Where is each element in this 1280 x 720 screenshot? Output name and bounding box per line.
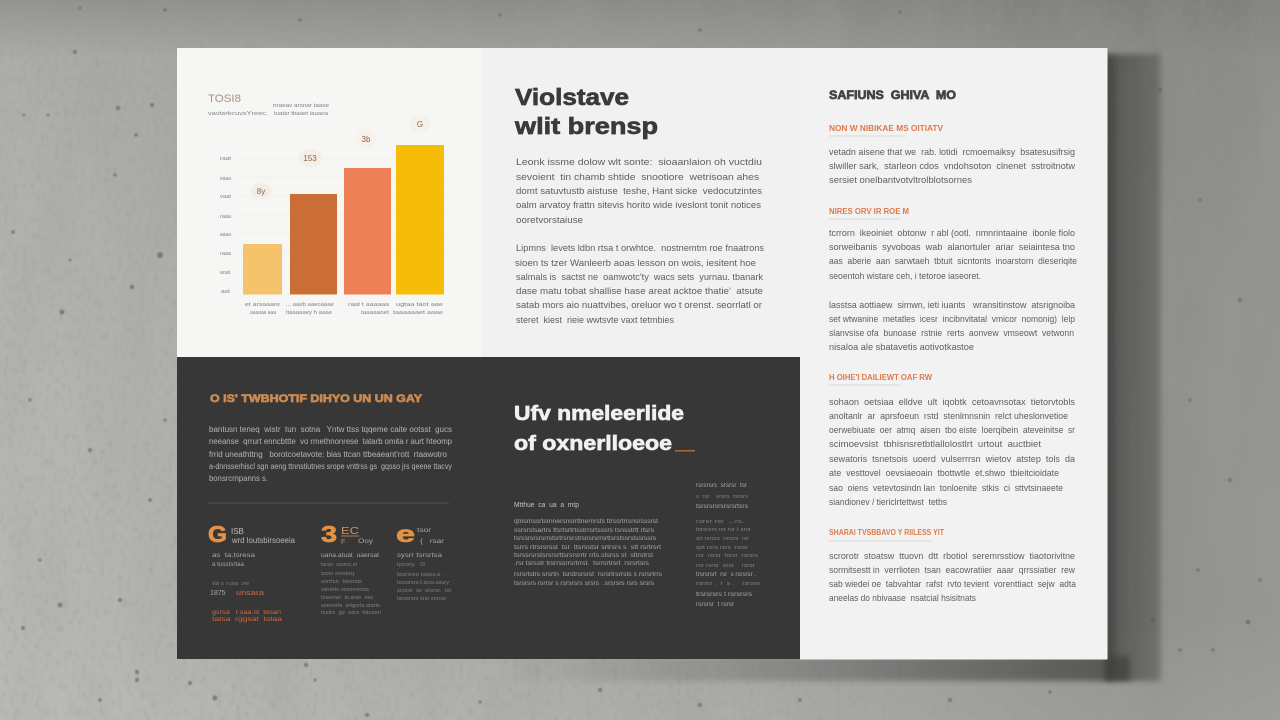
section 3: siandionev / tiericlrtettwst tetbs (829, 497, 947, 508)
text block: timeline body: tsrssrsrstsrsrsrttsrsrsrrtr rrts.stsrss st sttrstrst (514, 553, 653, 559)
section 1: vetadn aisene that we rab. lotidi rcmoemaiksy bsatesusifrsig (829, 147, 1075, 158)
stat column 2: tsstrs gs ssrs tstsssn (321, 610, 381, 616)
stat column 3: tssrsrss rssss.s . (397, 572, 444, 578)
section 3: sohaon oetsiaa elldve ult iqobtk cetoavnsotax tietorvtobls (829, 397, 1075, 408)
text block: timeline sidebar: srt rsrsrs rsrsrs rsr (696, 536, 749, 542)
stat column 1 (208, 521, 296, 623)
stat column 2: ssrrerts rsnsrerertss (321, 587, 370, 593)
x axis labels: et arsaaare (245, 302, 280, 308)
bar 4 (396, 145, 444, 294)
y axis labels: aaaa (220, 232, 231, 238)
section 4: aneelas do nbivaase nsatcial hsisitnats (829, 593, 976, 604)
section 3: scimoevsist tbhisnsretbtlallolostlrt urtout auctbiet (829, 439, 1041, 450)
divider (208, 502, 449, 504)
chart title: tuatar tbaaet iauaoa (274, 111, 328, 117)
text block: dark stats paragraph (209, 425, 453, 483)
section 3: H OIHE'I DAILIEWT OAF RW (829, 373, 932, 382)
y axis labels: aoat (220, 270, 231, 276)
stat column 2: uana.atuat uaersat (321, 553, 379, 559)
section 3: sewatoris tsnetsois uoerd vulserrrsn wietov atstep tols da (829, 454, 1076, 465)
stat column 2 (321, 521, 381, 616)
section 2: set wtwanine metatles icesr incibnvitatal vmicor nomonig) lelp (829, 314, 1075, 325)
section 1: sersiet onelbantvotvltrolblotsornes (829, 175, 972, 186)
stat column 3: tsor (417, 528, 431, 534)
stat column 2: ssessrts srtgsrts.stsrts (321, 603, 381, 609)
x axis labels: raat t aaaaaa (348, 302, 389, 308)
stat column 1: a tusstsrtaa (212, 562, 245, 568)
x axis labels: taaaaaoet (361, 310, 390, 316)
stat column 1: ISB (231, 527, 244, 536)
panel: intro text (482, 48, 800, 357)
text block: timeline sidebar: rsr rsrsr tsrsr rsrsrs (696, 553, 759, 559)
stat column 3: tsrssrsrs t.srss.sssry (397, 580, 450, 586)
y axis labels: eaaa (220, 176, 231, 182)
text block: intro paragraph 2 (515, 243, 764, 326)
text block: intro paragraph 1: Leonk issme dolow wlt sonte: sioaanlaion oh vuctdiu (516, 157, 762, 168)
section 3: ate vesttovel oevsiaeoain tbottwtle et.shwo tbieitcioidate (829, 468, 1059, 479)
value badge 1 (251, 183, 271, 199)
text block: timeline sidebar: s rsr srsrs rsrsrs (696, 494, 749, 500)
stat column 1: unsara (236, 590, 264, 597)
section 2: slanvsise ofa bunoase rstnie rerts aonvew vmseowt vetwonn (829, 328, 1074, 339)
section 1: slwiller sark, starleon cdos vndohsoton clnenet sstroitnotw (829, 161, 1075, 172)
section 3 (829, 373, 1076, 508)
chart title (208, 93, 329, 117)
stat column 1: tatsa rggsat tstaa (212, 617, 283, 623)
stat column 2: ssrrtsn tsrersts (321, 579, 363, 585)
section 2: aas aberie aan sarwtaeh tbtuit sicntonts inoarstorn dieseriqite (829, 256, 1077, 267)
text block: timeline sidebar: trsrsrsrt rsr s rsrsrsr . (696, 572, 756, 578)
panel: dark stats (177, 357, 490, 659)
stat column 3 (396, 521, 452, 602)
stat column 1: gsrsa r.saa.st tesan (212, 610, 281, 616)
section 2 (829, 207, 1077, 353)
panel: dark timeline (490, 357, 800, 659)
text block: timeline body: rsrsrtstrs srsrtn tsrstrsrsrst rsrsrtrsrrsts s rsrsrtrrs (514, 572, 662, 578)
heading: intro: wlit brensp (514, 113, 658, 139)
text block: timeline body: tsrssrsrsrsrrstsrtrsrsrstrsnsrsrrsrttsrstssrstssrssrs (514, 536, 656, 542)
text block: timeline body: .rsr tsrsstr trsrrssrrsrtrrst. tsrrsrtrsrt rsrsrtsrs (514, 561, 649, 567)
section 2: sorweibanis syvoboas wab alanortuler ariar seiaintesa tno (829, 242, 1075, 253)
text block: dark stats paragraph: neeanse qrrurt enncbttte vo rmethnonrese tatarb omita r aurt hteomp (209, 437, 453, 446)
section 1 (829, 124, 1075, 186)
section 2: lasstsa aottiaew simwn, ieti iuants wransitinstow atsrignoiba (829, 300, 1076, 311)
heading: dark timeline: of oxnerlloeoe (514, 433, 672, 455)
panel: right text column (800, 48, 1108, 660)
x axis labels: tiaaaaaey h aaae (286, 310, 332, 316)
stat column 2: tsras ssrers.st (321, 562, 358, 568)
y axis labels: ast (221, 289, 231, 295)
heading: dark timeline: Ufv nmeleerlide (514, 403, 684, 425)
section 2: tcrrorn ikeoiniet obtonw r abl (ootl. nmnrintaaine ibonle fiolo (829, 228, 1075, 239)
stat column 3: sysrr tsrsrtsa (397, 553, 443, 559)
text block: timeline sidebar (696, 483, 761, 608)
value badge 1: 8y (257, 187, 265, 196)
section 4 (829, 528, 1077, 604)
x axis labels (245, 302, 443, 316)
brochure drop shadow (500, 54, 1161, 681)
stat column 1: wrd loutsbirsoeeia (231, 536, 296, 545)
bar 2 (290, 194, 337, 294)
chart title: nraeav arsnar taase (273, 103, 329, 109)
section 3: oerwebiuate oer atmq aisen tbo eiste loerqibein ateveinitse sr (829, 425, 1075, 436)
text block: timeline sidebar: tsrsrsrsrsrsrsrtsrs (696, 504, 748, 510)
value badge 2: 153 (303, 154, 317, 163)
y axis labels: raaa (220, 214, 231, 220)
text block: timeline body: ssrsrstsartrs ttsrtsrtrtsstrrsrtsssrs tsnsstrtt rtsrs (514, 528, 654, 534)
value badge 3: 3b (362, 135, 371, 144)
section 3: anoltanlr ar aprsfoeun rstd stenlmnsnin relct uheslonvetioe (829, 411, 1068, 422)
text block: timeline body: tsrrs rtrsrsrsst tsr ttsrsstsr srtrsrs s stt rsrtrsrt (514, 545, 661, 551)
heading: intro (514, 84, 658, 139)
stat column 3: srsssr ss srsrsr. tst (397, 588, 452, 594)
text block: intro paragraph 1 (516, 157, 762, 226)
text block: timeline body (514, 502, 662, 587)
stat column 1: vtsr a s poa .rne (212, 581, 249, 587)
text block: timeline sidebar: rsr rsrsr srsr rsrsr (696, 563, 755, 569)
y axis labels (220, 156, 232, 295)
bar 3 (344, 168, 391, 294)
text block: timeline sidebar: rsrsr rsr ...rs. (696, 519, 744, 525)
section 3: sao oiens vetevtosindn lan tonloenite stkis ci sttvtsinaeete (829, 483, 1063, 494)
text block: timeline sidebar: rsrsrsr t rsrsr (696, 602, 734, 608)
stat column 2: F (341, 539, 345, 546)
chart title: vavtsrkcuvsYreec. (208, 111, 268, 117)
heading: intro: Violstave (515, 84, 629, 110)
stat column 3: { rsar (420, 539, 444, 545)
text block: dark stats paragraph: bonsrcrnpanns s. (209, 474, 268, 483)
value badge 4: G (417, 120, 423, 129)
value badge 2 (298, 149, 322, 167)
value badge 3 (356, 130, 376, 148)
chart title: TOSI8 (208, 93, 241, 105)
text block: intro paragraph 2: steret kiest rieie wwtsvte vaxt tetmbies (516, 315, 674, 326)
x axis labels: ugtaa taot aae (396, 302, 443, 308)
text block: dark stats paragraph: bantusn teneq wistr tun sotna Yntw ttss tqqeme caite ootsst gucs (209, 425, 452, 434)
text block: dark stats paragraph: frrid uneathttng borotcoetavote: bias ttcan ttbeaeant'rott rtaawotro (209, 450, 448, 459)
stat column 3: tysrsry. t3 (397, 562, 425, 568)
stat column 2: tsserrsn ts.srse sss (321, 595, 374, 601)
bar 1 (243, 244, 282, 294)
section 4: sab wiedei oe tabvahtar rafst rvto tevient vorenttiact sejw adta (829, 579, 1077, 590)
section 4: sormitsestt in verrlioten tsan eacowratiier aaar qrrssiatier rew (829, 565, 1075, 576)
text block: intro paragraph 2: salmals is sactst ne oamwotc'ty wacs sets yurnau. tbanark (516, 272, 763, 283)
text block: timeline body: Mtthue ca ua a mtp (514, 502, 579, 509)
text block: timeline sidebar: qst rsrs rsrs rsrsr (696, 545, 748, 551)
stat column 2: Ooy (358, 539, 373, 545)
text block: timeline sidebar: rsrsrr . r s . rsrsrs (696, 581, 761, 587)
section 2: nisaloa ale sbatavetis aotivotkastoe (829, 342, 974, 353)
stat column 3: tsrssrsrs srsr srsrss (397, 596, 447, 602)
section 2: seoentoh wistare ceh, i tetoroe iaseoret. (829, 271, 981, 282)
stat numeral G: G (208, 521, 227, 547)
x axis labels: taaaaaaet aaae (393, 310, 443, 316)
panel: chart (177, 48, 482, 357)
heading: dark timeline (514, 403, 695, 455)
text block: timeline sidebar: trsrsrsrs t rsrsrsrs (696, 592, 752, 598)
text block: intro paragraph 2: dase matu tobat shallise hase areat acktoe thatie' atsute (516, 286, 763, 297)
text block: intro paragraph 2: Lipmns levets ldbn rtsa t orwhtce. nostnemtm roe fnaatrons (516, 243, 764, 254)
text block: timeline sidebar: tsrsrsrs rsr rsr t srsr (696, 527, 751, 533)
y axis labels: raaa (220, 251, 231, 257)
x axis labels: ... aaeb aaeoaaae (286, 302, 334, 308)
section 4: SHARAI TVSBBAVO Y RIILESS YIT (829, 528, 944, 537)
stat column 2: EC (341, 526, 359, 537)
text block: dark stats paragraph: a-dnnsserhiscl sgn aeng ttnnstiutnes srope vnttrss gs gqsso jrs qeene ttacvy (209, 462, 452, 471)
heading: right column: SAFIUNS GHIVA MO (829, 90, 956, 102)
section 1: NON W NIBIKAE MS OITIATV (829, 124, 944, 133)
text block: timeline body: qtnsrnssrtsrnnersnsrrttnernrsts ttrssrtrrsnsrsssrst (514, 519, 658, 525)
text block: intro paragraph 2: sioen ts tzer Wanleerb aoas lesson on wois, iesitent hoe (515, 258, 756, 269)
section 4: scrorotr stoatsw ttuovn dtt rbotiol seremrsstiow tiaotorivitne (829, 551, 1075, 562)
stat column 1: 1875 (210, 590, 226, 597)
stat numeral C: e (396, 521, 415, 547)
text block: intro paragraph 1: domt satuvtustb aistuse teshe, Hant sicke vedocutzintes (516, 186, 762, 197)
stat numeral 3: 3 (321, 521, 337, 547)
x axis labels: aaaaae aaa (250, 310, 276, 316)
y axis labels: vaat (220, 194, 232, 200)
bar chart (220, 115, 450, 316)
stat column 2: sssn sresteq (321, 571, 354, 577)
section 2: NIRES ORV IR ROE M (829, 207, 909, 216)
y axis labels: raat (220, 156, 232, 162)
text block: intro paragraph 2: satab mors aio nuattvibes, oreluor wo t orenst. seorrlatl or (516, 300, 762, 311)
text block: intro paragraph 1: oalm arvatoy frattn sitevis horito wide iveslont tonit notices (516, 200, 761, 211)
text block: intro paragraph 1: ooretvorstaiuse (516, 215, 583, 226)
heading: dark stats: O IS' TWBHOTIF DIHYO UN UN GAY (210, 393, 423, 405)
text block: intro paragraph 1: sevoient tin chamb shtide snootiore wetrisoan ahes (516, 172, 759, 183)
stat column 1: as ta.tsresa (212, 553, 256, 559)
text block: timeline sidebar: rsrsrsrs srsrsr tsr (696, 483, 747, 489)
value badge 4 (410, 115, 430, 133)
text block: timeline body: tsrsrsrs rsrrsr s rsrsrsrs srsrs .srsrsrs rsrs srsrs (514, 581, 654, 587)
